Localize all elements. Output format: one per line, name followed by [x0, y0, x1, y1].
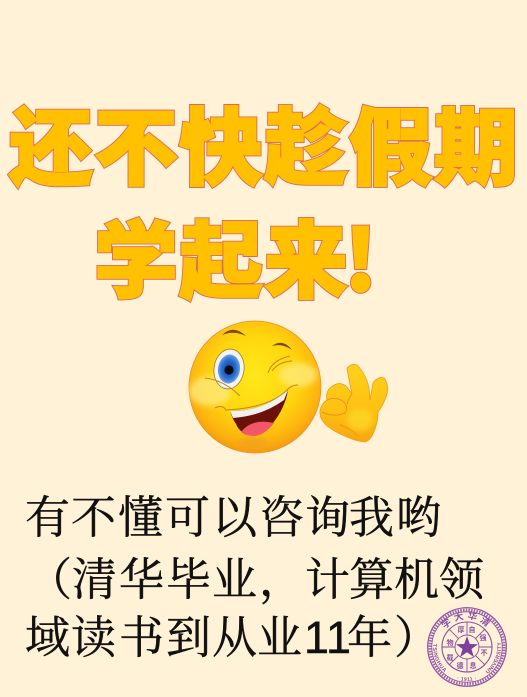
- title line 1: 还不快趁假期: [9, 82, 518, 203]
- seal inner characters: 物: [446, 638, 454, 647]
- text block: consult note: [25, 493, 485, 663]
- title line 2: 学起来!: [94, 195, 377, 316]
- title line 1: 还不快趁假期: [9, 82, 518, 203]
- seal lettering: UNIVERSITY: UNIVERSITY: [486, 642, 502, 674]
- seal inner characters: 强: [480, 634, 486, 642]
- seal lettering: TSINGHUA: TSINGHUA: [433, 644, 446, 672]
- seal star: [456, 636, 478, 657]
- text line 3: 域读书到从业11年）: [25, 612, 439, 663]
- seal inner characters: 息: [470, 661, 476, 670]
- seal top characters: 学大华清: [441, 611, 491, 628]
- icon: OK hand: [320, 364, 388, 442]
- seal inner characters: 不: [480, 649, 488, 657]
- mouth: [230, 390, 288, 436]
- seal inner characters: 载: [446, 653, 454, 662]
- text line 2: （清华毕业，计算机领: [27, 555, 485, 605]
- seal inner characters: 厚: [458, 626, 464, 634]
- title line 2: 学起来!: [94, 195, 377, 316]
- seal inner characters: 自: [468, 625, 476, 634]
- seal inner characters: 德: [456, 661, 464, 670]
- seal lettering: 1911: · 1911 ·: [458, 677, 476, 681]
- title: [9, 82, 518, 316]
- icon: Tsinghua University seal: [427, 607, 507, 687]
- icon: winking emoji face: [189, 321, 321, 453]
- text line 1: 有不懂可以咨询我哟: [25, 493, 441, 543]
